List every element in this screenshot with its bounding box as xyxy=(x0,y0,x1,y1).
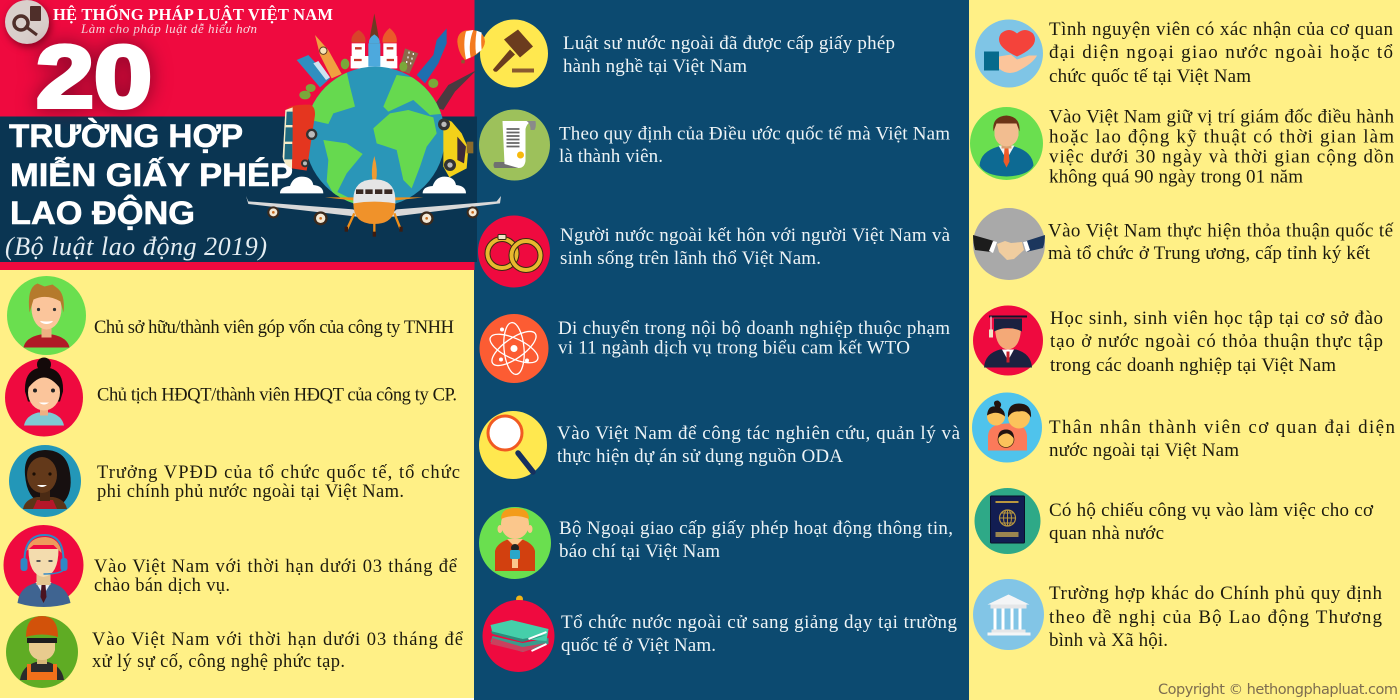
text: official passport: Có hộ chiếu công vụ vào làm việc cho cơ xyxy=(1049,500,1374,521)
text: international treaty: Theo quy định của Điều ước quốc tế mà Việt Nam xyxy=(559,124,950,144)
item 4: sales services xyxy=(4,525,458,607)
text: ODA research: Vào Việt Nam để công tác nghiên cứu, quản lý và xyxy=(557,423,961,444)
title: LAO ĐỘNG xyxy=(10,195,195,231)
text: technical incident: xử lý sự cố, công nghệ phức tạp. xyxy=(92,652,345,672)
text: official passport xyxy=(1049,500,1374,544)
hot air balloon xyxy=(457,30,485,63)
text: students: tạo ở nước ngoài có thỏa thuận thực tập xyxy=(1050,331,1383,352)
globe xyxy=(308,66,444,204)
text: international school teacher xyxy=(561,612,958,656)
red bus xyxy=(283,105,317,171)
text: intra-company transfer: vi 11 ngành dịch vụ trong biểu cam kết WTO xyxy=(558,338,910,358)
text: representative office head: Trưởng VPĐD của tổ chức quốc tế, tổ chức xyxy=(97,463,460,483)
panel: header banner xyxy=(0,0,501,270)
item 7: international treaty xyxy=(479,110,950,180)
text: executive or technical worker: Vào Việt Nam giữ vị trí giám đốc điều hành xyxy=(1049,107,1394,128)
text: sales services xyxy=(94,557,458,596)
item 12: international school teacher xyxy=(482,596,958,672)
item 8: marriage xyxy=(478,216,951,288)
text: international school teacher: Tổ chức nước ngoài cử sang giảng dạy tại trường xyxy=(561,612,958,633)
item 9: intra-company transfer xyxy=(480,314,950,383)
text: international treaty: là thành viên. xyxy=(559,146,663,167)
text: sales services: Vào Việt Nam với thời hạn dưới 03 tháng để xyxy=(94,557,458,577)
icon: family xyxy=(972,392,1042,462)
text: technical incident xyxy=(92,630,464,672)
icon: handshake xyxy=(973,208,1045,280)
item 1: company owner xyxy=(7,276,454,355)
text: marriage xyxy=(560,225,951,269)
text: official passport: quan nhà nước xyxy=(1049,523,1164,544)
icon: scroll document xyxy=(479,110,550,180)
item 3: representative office head xyxy=(9,445,460,517)
text: company owner: Chủ sở hữu/thành viên góp vốn của công ty TNHH xyxy=(94,318,454,338)
panel: center list of exemptions xyxy=(474,0,969,700)
icon: stack of books xyxy=(482,596,554,672)
text: international treaty xyxy=(559,124,950,167)
text: executive or technical worker: hoặc lao động kỹ thuật có thời gian làm xyxy=(1049,127,1394,148)
text: volunteer xyxy=(1049,19,1394,87)
icon: magnifying glass xyxy=(479,411,547,479)
icon: woman with hair bun avatar xyxy=(5,358,83,436)
icon: government building xyxy=(973,579,1044,650)
text: international agreement xyxy=(1048,221,1394,264)
icon: gavel xyxy=(480,20,548,88)
big number 20: 20 xyxy=(36,27,152,126)
item 15: international agreement xyxy=(973,208,1394,280)
site slogan: Làm cho pháp luật dễ hiểu hơn xyxy=(80,21,257,36)
item 14: executive or technical worker xyxy=(970,107,1394,188)
title: MIỄN GIẤY PHÉP xyxy=(10,157,293,193)
text: international school teacher: quốc tế ở Việt Nam. xyxy=(561,635,716,656)
text: relatives of diplomats xyxy=(1049,417,1396,461)
subtitle: (Bộ luật lao động 2019) xyxy=(5,232,267,261)
icon: graduate avatar xyxy=(973,306,1043,376)
item 6: foreign lawyer xyxy=(480,20,895,88)
icon: wedding rings xyxy=(478,216,550,288)
text: ODA research xyxy=(557,423,961,467)
text: relatives of diplomats: nước ngoài tại Việt Nam xyxy=(1049,440,1239,461)
text: students xyxy=(1050,308,1383,376)
text: foreign lawyer: Luật sư nước ngoài đã được cấp giấy phép xyxy=(563,33,895,54)
text: marriage: sinh sống trên lãnh thổ Việt Nam. xyxy=(560,248,821,269)
clouds xyxy=(280,177,466,193)
text: representative office head: phi chính phủ nước ngoài tại Việt Nam. xyxy=(97,482,404,502)
text: other government cases xyxy=(1049,583,1382,651)
panel: left list of exemptions xyxy=(0,270,475,698)
text: marriage: Người nước ngoài kết hôn với người Việt Nam và xyxy=(560,225,951,246)
text: international agreement: Vào Việt Nam thực hiện thỏa thuận quốc tế xyxy=(1048,221,1394,242)
text: students: Học sinh, sinh viên học tập tại cơ sở đào xyxy=(1050,308,1383,329)
title xyxy=(9,118,293,231)
text: intra-company transfer: Di chuyển trong nội bộ doanh nghiệp thuộc phạm xyxy=(558,318,950,339)
icon: businessman avatar xyxy=(970,107,1043,180)
icon: young man avatar xyxy=(7,276,86,355)
text: executive or technical worker xyxy=(1049,107,1394,188)
yellow car xyxy=(438,118,473,177)
text: volunteer: chức quốc tế tại Việt Nam xyxy=(1049,66,1251,87)
text: international agreement: mà tổ chức ở Trung ương, cấp tỉnh ký kết xyxy=(1048,243,1371,264)
site name: HỆ THỐNG PHÁP LUẬT VIỆT NAM xyxy=(53,4,333,24)
text: executive or technical worker: việc dưới 30 ngày và thời gian cộng dồn xyxy=(1049,147,1394,168)
text: journalist: báo chí tại Việt Nam xyxy=(559,541,720,562)
icon: reporter with microphone xyxy=(479,507,551,579)
item 13: volunteer xyxy=(975,19,1394,88)
copyright note: Copyright © hethongphapluat.com xyxy=(1158,682,1398,698)
item 19-20: other government cases xyxy=(973,579,1382,651)
text: foreign lawyer: hành nghề tại Việt Nam xyxy=(563,56,747,77)
text: ODA research: thực hiện dự án sử dụng nguồn ODA xyxy=(557,446,843,467)
item 10: ODA research xyxy=(479,411,961,479)
text: volunteer: Tình nguyện viên có xác nhận của cơ quan xyxy=(1049,19,1394,40)
logo: gavel seal xyxy=(5,0,49,44)
text: sales services: chào bán dịch vụ. xyxy=(94,576,230,596)
icon: engineer with orange helmet avatar xyxy=(6,616,78,688)
icon: agent with headset avatar xyxy=(4,525,84,607)
airplane xyxy=(246,156,501,237)
title: TRƯỜNG HỢP xyxy=(9,118,243,154)
text: other government cases: theo đề nghị của Bộ Lao động Thương xyxy=(1049,607,1382,628)
text: intra-company transfer xyxy=(558,318,950,358)
item 5: technical incident xyxy=(6,616,464,688)
illustration: globe, landmarks, vehicles and airplane xyxy=(246,13,501,237)
text: relatives of diplomats: Thân nhân thành viên cơ quan đại diện xyxy=(1049,417,1396,438)
icon: atom xyxy=(480,314,548,383)
item 16: students xyxy=(973,306,1383,376)
text: students: trong các doanh nghiệp tại Việt Nam xyxy=(1050,355,1336,376)
text: technical incident: Vào Việt Nam với thời hạn dưới 03 tháng để xyxy=(92,630,464,650)
item 11: journalist xyxy=(479,507,953,579)
text: board chairman: Chủ tịch HĐQT/thành viên HĐQT của công ty CP. xyxy=(97,386,457,406)
icon: woman with curly hair avatar xyxy=(9,445,81,517)
landmarks around the globe xyxy=(297,13,477,110)
text: volunteer: đại diện ngoại giao nước ngoài hoặc tổ xyxy=(1049,42,1393,63)
item 18: official passport xyxy=(974,488,1374,554)
text: foreign lawyer xyxy=(563,33,895,77)
text: other government cases: Trường hợp khác do Chính phủ quy định xyxy=(1049,583,1382,604)
icon: hand holding heart xyxy=(975,20,1043,88)
item 17: relatives of diplomats xyxy=(972,392,1396,462)
icon: passport xyxy=(974,488,1040,554)
text: other government cases: bình và Xã hội. xyxy=(1049,630,1168,651)
text: journalist: Bộ Ngoại giao cấp giấy phép hoạt động thông tin, xyxy=(559,518,953,539)
text: representative office head xyxy=(97,463,460,502)
text: executive or technical worker: không quá 90 ngày trong 01 năm xyxy=(1049,167,1303,188)
text: journalist xyxy=(559,518,953,562)
item 2: board chairman xyxy=(5,358,457,436)
panel: right list of exemptions xyxy=(969,0,1400,700)
